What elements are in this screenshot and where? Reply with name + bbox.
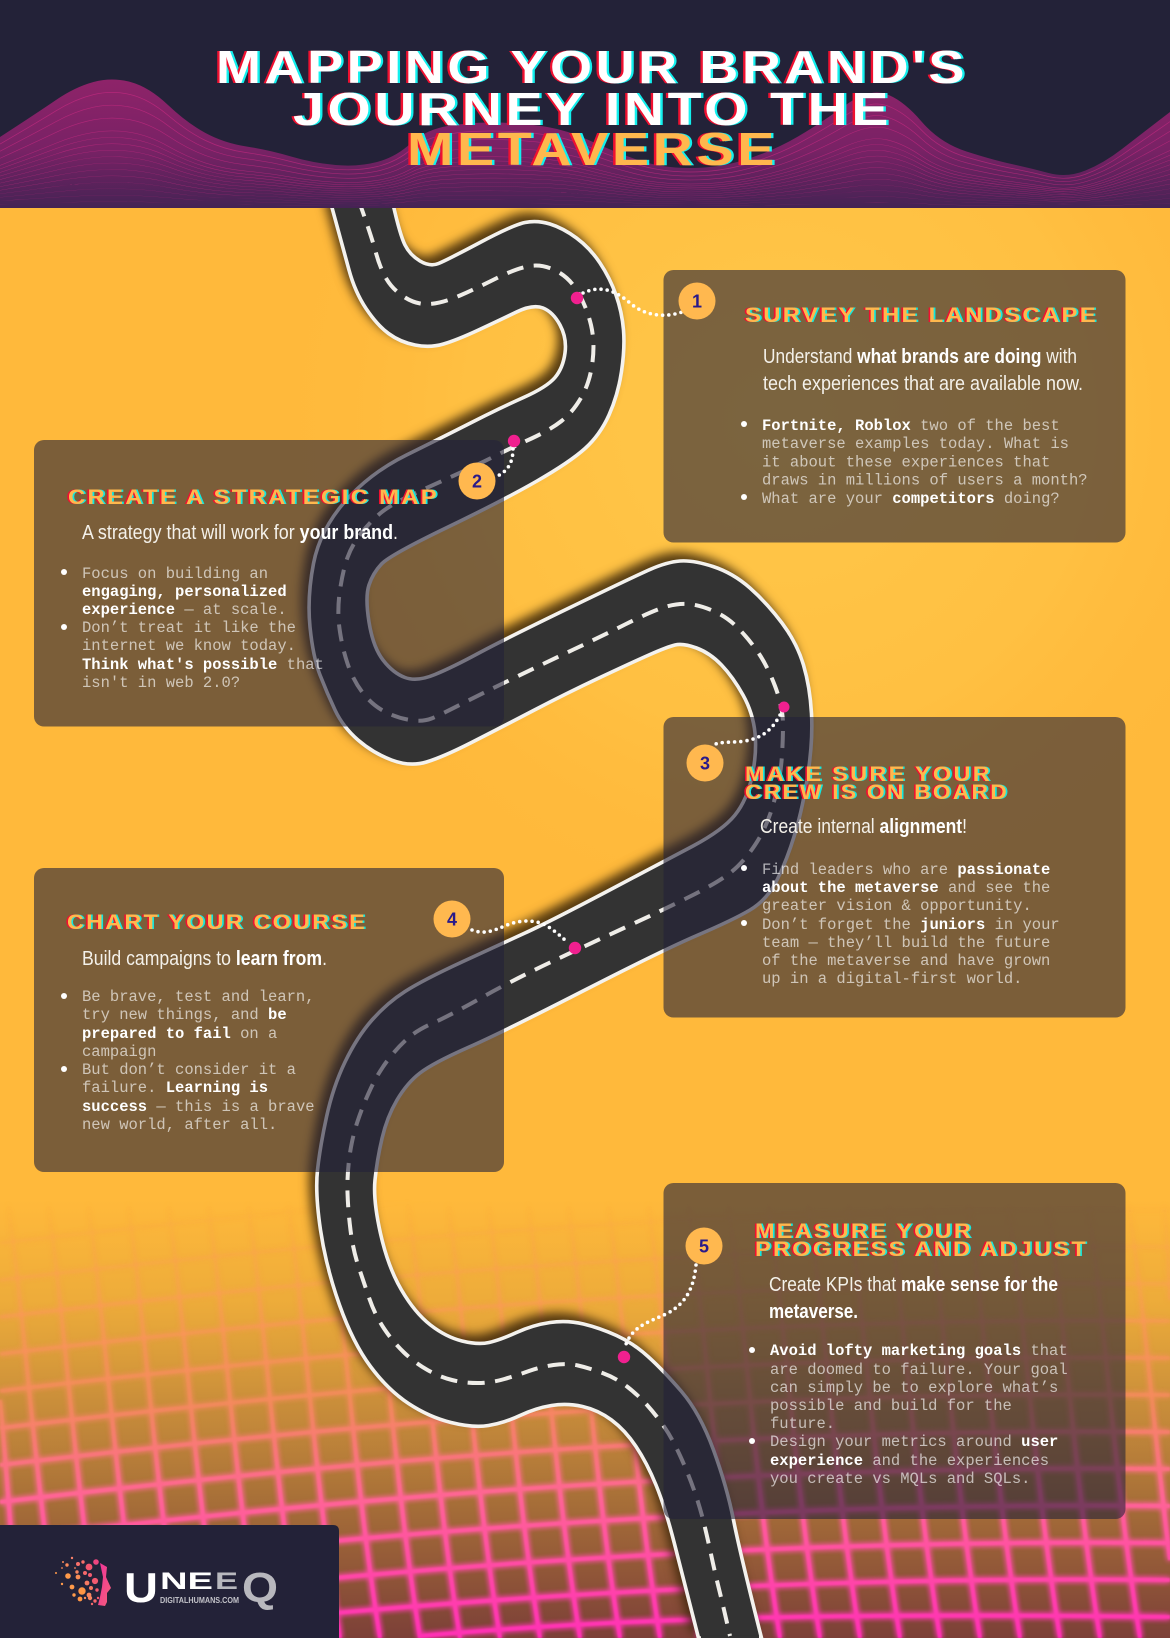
marker 3: connector, pin and number (686, 702, 790, 782)
bullet list 5: experience and the experiences (770, 1452, 1049, 1470)
bullet list 5: Design your metrics around user (770, 1433, 1058, 1451)
panel 4: chart your course (34, 868, 504, 1172)
bullet list 4: new world, after all. (82, 1116, 277, 1134)
bullet list 3: about the metaverse and see the (762, 879, 1050, 897)
bullet list 5 (749, 1342, 1068, 1488)
panel 1: survey the landscape (664, 270, 1126, 542)
bullet list 1: it about these experiences that (762, 454, 1050, 472)
bullet list 3: of the metaverse and have grown (762, 952, 1050, 970)
heading 5: PROGRESS AND ADJUST (755, 1238, 1088, 1261)
bullet list 2: experience — at scale. (82, 601, 287, 619)
lead text 5 (769, 1273, 1058, 1323)
lead text 3: Create internal alignment! (760, 815, 967, 838)
marker 5: connector, pin and number: 5 (699, 1236, 709, 1256)
heading 5: MEASURE YOUR (755, 1220, 973, 1243)
lead text 1: Understand what brands are doing with (763, 345, 1077, 368)
bullet list 1: What are your competitors doing? (762, 490, 1060, 508)
marker 2: connector, pin and number (458, 435, 520, 500)
bullet list 3: team — they’ll build the future (762, 934, 1050, 952)
title: MAPPING YOUR BRAND'S (216, 41, 968, 93)
heading 5 (755, 1220, 1088, 1261)
bullet list 4: try new things, and be (82, 1006, 287, 1024)
bullet list 4: failure. Learning is (82, 1079, 268, 1097)
marker 3: connector, pin and number: 3 (700, 754, 710, 774)
bullet list 4: Be brave, test and learn, (82, 988, 315, 1006)
lead text 4: Build campaigns to learn from. (82, 947, 327, 970)
title: METAVERSE (407, 123, 778, 175)
heading 1: SURVEY THE LANDSCAPE (745, 304, 1098, 327)
lead text 2: A strategy that will work for your brand. (82, 521, 398, 544)
icon: dotted digital head (55, 1557, 111, 1606)
lead text 5: Create KPIs that make sense for the (769, 1273, 1058, 1296)
bullet list 2: engaging, personalized (82, 583, 287, 601)
marker 4: connector, pin and number (434, 900, 581, 954)
winding road (309, 204, 812, 1638)
header band (0, 0, 1170, 208)
logo wordmark: DIGITALHUMANS.COM (160, 1595, 239, 1605)
lead text 5: metaverse. (769, 1300, 858, 1323)
bullet list 2 (61, 565, 324, 692)
bullet list 3: greater vision & opportunity. (762, 897, 1032, 915)
logo wordmark: Q (242, 1564, 278, 1611)
bullet list 1 (741, 417, 1088, 508)
marker 1: connector, pin and number: 1 (692, 292, 702, 312)
wave decoration (0, 80, 1170, 208)
road surface (309, 204, 812, 1638)
bullet list 5: future. (770, 1415, 835, 1433)
marker 2: connector, pin and number: 2 (472, 472, 482, 492)
road centre dashes (338, 204, 783, 1636)
logo wordmark (124, 1564, 278, 1611)
title (216, 41, 968, 175)
logo wordmark: NE (160, 1568, 213, 1595)
panel 2: create a strategic map (34, 440, 504, 726)
marker 5: connector, pin and number (618, 1228, 722, 1363)
panel 3: make sure your crew is on board (664, 717, 1126, 1018)
bullet list 1: Fortnite, Roblox two of the best (762, 417, 1060, 435)
heading 2: CREATE A STRATEGIC MAP (68, 486, 439, 509)
marker 4: connector, pin and number: 4 (447, 910, 457, 930)
bullet list 4 (61, 988, 315, 1134)
bullet list 3: Don’t forget the juniors in your (762, 916, 1060, 934)
bullet list 2: isn't in web 2.0? (82, 674, 240, 692)
bullet list 2: internet we know today. (82, 637, 296, 655)
bullet list 4: campaign (82, 1043, 156, 1061)
heading 3: MAKE SURE YOUR (745, 763, 992, 786)
logo wordmark: U (124, 1564, 158, 1611)
bullet list 3: Find leaders who are passionate (762, 861, 1050, 879)
marker 1: connector, pin and number (571, 282, 716, 320)
background: neon pink grid (0, 1150, 1170, 1638)
road end cover (701, 1635, 759, 1638)
logo wordmark: E (215, 1568, 238, 1595)
title: JOURNEY INTO THE (293, 83, 892, 135)
bullet list 5: can simply be to explore what’s (770, 1379, 1058, 1397)
lead text 1 (763, 345, 1083, 395)
footer logo panel (0, 1525, 339, 1638)
bullet list 4: success — this is a brave (82, 1098, 315, 1116)
bullet list 3: up in a digital-first world. (762, 970, 1022, 988)
bullet list 5: you create vs MQLs and SQLs. (770, 1470, 1030, 1488)
bullet list 5: Avoid lofty marketing goals that (770, 1342, 1068, 1360)
bullet list 5: are doomed to failure. Your goal (770, 1361, 1068, 1379)
bullet list 4: But don’t consider it a (82, 1061, 296, 1079)
bullet list 4: prepared to fail on a (82, 1025, 277, 1043)
bullet list 5: possible and build for the (770, 1397, 1012, 1415)
bullet list 2: Focus on building an (82, 565, 268, 583)
bullet list 1: metaverse examples today. What is (762, 435, 1069, 453)
bullet list 2: Think what's possible that (82, 656, 324, 674)
heading 3 (745, 763, 1009, 804)
panel 5: measure your progress and adjust (664, 1183, 1126, 1519)
lead text 1: tech experiences that are available now. (763, 372, 1083, 395)
heading 4: CHART YOUR COURSE (67, 911, 367, 934)
bullet list 2: Don’t treat it like the (82, 619, 296, 637)
bullet list 3 (741, 861, 1060, 988)
heading 3: CREW IS ON BOARD (745, 781, 1009, 804)
bullet list 1: draws in millions of users a month? (762, 472, 1088, 490)
